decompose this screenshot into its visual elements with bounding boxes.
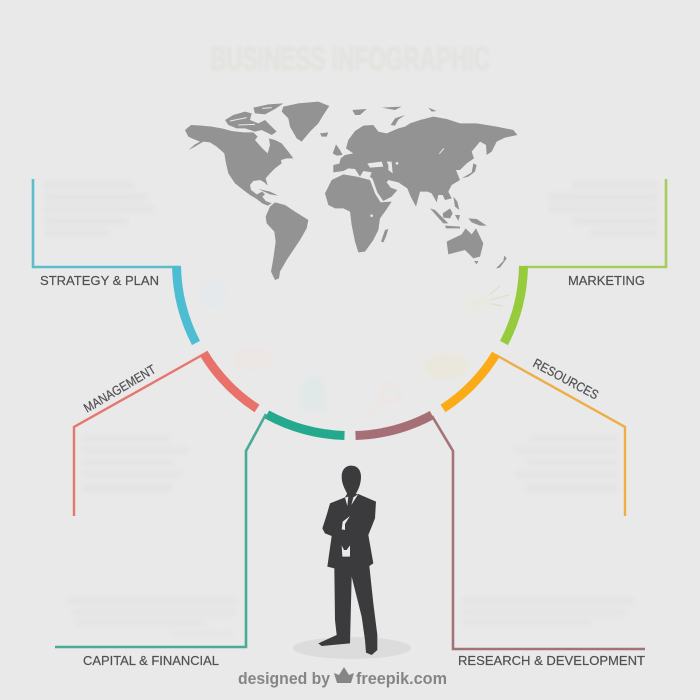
label: RESEARCH & DEVELOPMENT [458,653,645,668]
arc segment [356,415,432,436]
placeholder text [66,597,238,636]
icon: money bag [300,376,327,410]
connector line [33,179,180,267]
icon: megaphone [461,286,509,316]
Sulawesi [455,215,460,221]
arc segment [504,266,524,343]
connector line [55,414,266,647]
Tasmania [474,261,478,264]
Svalbard [352,109,367,115]
Novaya Zemlya [391,115,405,126]
arc segment [443,354,496,408]
Aral Sea [396,162,398,165]
ground shadow [293,637,411,659]
Lake Victoria [370,214,373,217]
Java [445,226,460,228]
label: RESOURCES [531,355,601,403]
placeholder text [44,181,154,237]
Africa [325,174,392,252]
suit [318,493,377,655]
island channels [230,108,272,125]
arc segment [204,353,257,408]
Baffin and Ellesmere [253,103,283,114]
Japan [462,163,477,178]
Lake Baikal [439,148,444,154]
Iceland [320,132,328,137]
icon: cream blob [423,353,469,381]
head [342,466,361,494]
map: Americas and Greenland [185,102,329,280]
North America [185,125,293,206]
New Zealand [496,256,507,268]
megaphone body [461,293,490,316]
businessman figure [293,466,411,659]
Eurasia [333,117,517,207]
connector line [496,355,625,516]
world map [185,102,517,280]
panel: strategy and plan [33,179,228,343]
Madagascar [381,229,388,242]
icon: magnifier [369,384,400,413]
panel: resources [423,353,625,516]
Caspian Sea [387,162,393,173]
Greenland [282,102,329,142]
Severnaya Zemlya [428,108,437,112]
panel: capital and financial [55,376,344,668]
connector line [524,179,666,267]
Borneo [443,208,453,218]
Cuba [258,189,278,196]
shirt cuff [342,516,350,530]
Black Sea [367,162,383,168]
megaphone rays [489,286,509,306]
connector line [432,416,645,649]
label: CAPITAL & FINANCIAL [83,653,219,668]
panel: marketing [461,179,666,343]
Philippines [453,197,459,210]
label: STRATEGY & PLAN [40,273,159,288]
arc segment [267,414,344,436]
label: MARKETING [568,273,645,288]
icon: cloud [235,348,271,370]
Arctic islands [225,112,277,135]
map: Europe, Asia, Africa and Oceania [325,107,517,268]
silhouette [318,466,377,655]
shirt gap [342,545,350,557]
panel: management [74,348,271,516]
icon: gear [198,279,228,309]
connector line [74,354,204,516]
panel: research and development [356,384,645,668]
Australia [447,228,483,258]
footer credit [238,667,447,688]
Franz Josef Land [382,107,402,110]
placeholder text [462,597,634,626]
New Guinea [468,218,487,226]
placeholder text [514,435,618,492]
label: MANAGEMENT [81,362,158,416]
Great Britain [333,144,343,156]
designed by text: designed by [238,669,331,688]
arc segment [176,266,196,343]
shirt collar [345,494,358,506]
Sumatra [430,208,448,223]
title: BUSINESS INFOGRAPHIC [210,40,490,77]
placeholder text [548,181,658,237]
placeholder text [82,435,188,492]
icon: freepik crown [334,667,354,683]
South America [266,202,308,280]
freepik text: freepik.com [356,669,447,688]
